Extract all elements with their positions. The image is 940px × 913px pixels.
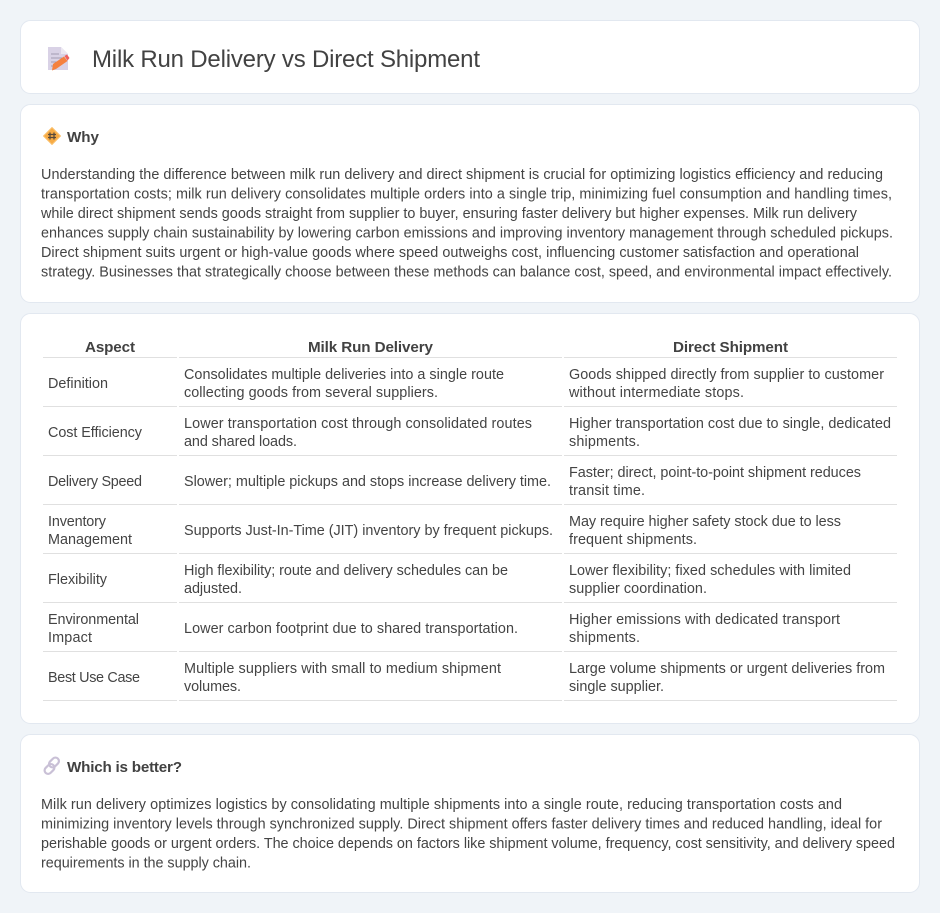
panel: why	[20, 104, 920, 302]
text block: which is better paragraph: requirements in the supply chain.	[41, 855, 251, 871]
row: delivery speed: transit time.	[569, 483, 645, 499]
row: delivery speed: Slower; multiple pickups and stops increase delivery time.	[184, 474, 551, 490]
row: cost efficiency	[43, 416, 897, 456]
row: inventory management	[43, 514, 897, 554]
row: flexibility: Flexibility	[48, 572, 108, 588]
row: definition: Goods shipped directly from supplier to customer	[569, 367, 884, 383]
text block: why paragraph: while direct shipment sends goods straight from supplier to buyer, ensuring faster delivery but higher expenses. Milk run delivery	[40, 206, 858, 222]
icon: warning diamond	[44, 128, 60, 144]
row: inventory management: Supports Just-In-Time (JIT) inventory by frequent pickups.	[184, 523, 553, 539]
panel: comparison table	[20, 314, 920, 724]
row: flexibility: Lower flexibility; fixed schedules with limited	[569, 563, 851, 579]
row: environmental impact	[43, 612, 897, 652]
heading: why: Why	[67, 129, 100, 146]
row: definition: without intermediate stops.	[568, 385, 744, 401]
row: inventory management: May require higher safety stock due to less	[569, 514, 841, 530]
row: cost efficiency: and shared loads.	[184, 434, 297, 450]
row: inventory management: Management	[48, 532, 132, 548]
row: inventory management: Inventory	[48, 514, 107, 530]
row: definition: Consolidates multiple deliveries into a single route	[184, 367, 504, 383]
row: environmental impact: Impact	[48, 630, 92, 646]
table header row	[43, 339, 897, 358]
text block: why paragraph: transportation costs; milk run delivery consolidates multiple orders into a single trip, minimizing fuel consumption and handling times,	[41, 186, 892, 202]
row: flexibility	[43, 563, 897, 602]
text block: which is better paragraph: perishable goods or urgent orders. The choice depends on factors like shipment volume, frequency, cost sensitivity, and delivery speed	[41, 836, 895, 852]
text block: which is better paragraph: Milk run delivery optimizes logistics by consolidating multiple shipments into a single route, reducing transportation costs and	[41, 797, 842, 813]
row: flexibility: supplier coordination.	[569, 581, 707, 597]
row: environmental impact: shipments.	[569, 630, 640, 646]
text block: why paragraph: strategy. Businesses that strategically choose between these methods can balance cost, speed, and environmental impact effectively.	[41, 264, 892, 280]
row: environmental impact: Higher emissions with dedicated transport	[569, 612, 840, 628]
title: Milk Run Delivery vs Direct Shipment	[92, 46, 480, 73]
row: cost efficiency: Higher transportation cost due to single, dedicated	[569, 416, 891, 432]
text block: which is better paragraph	[41, 797, 895, 871]
icon: document with pencil	[48, 47, 70, 70]
row: best use case: Best Use Case	[48, 670, 140, 686]
row: delivery speed: Delivery Speed	[48, 474, 142, 490]
row: best use case: Large volume shipments or urgent deliveries from	[569, 661, 885, 677]
row: inventory management: frequent shipments.	[569, 532, 697, 548]
table header row: Direct Shipment	[673, 339, 788, 356]
row: delivery speed: Faster; direct, point-to-point shipment reduces	[569, 465, 861, 481]
row: environmental impact: Lower carbon footprint due to shared transportation.	[184, 621, 518, 637]
row: flexibility: adjusted.	[184, 581, 242, 597]
heading: which is better: Which is better?	[67, 759, 182, 776]
row: delivery speed	[43, 465, 897, 504]
panel: which is better	[20, 734, 920, 892]
row: environmental impact: Environmental	[48, 612, 139, 628]
row: definition: Definition	[48, 376, 108, 392]
row: best use case	[43, 661, 897, 700]
row: cost efficiency: shipments.	[569, 434, 640, 450]
text block: why paragraph: Direct shipment suits urgent or high-value goods where speed outweighs cost, influencing customer satisfaction and operational	[41, 245, 859, 261]
row: best use case: volumes.	[184, 679, 241, 695]
icon: chain link	[43, 756, 60, 775]
row: cost efficiency: Cost Efficiency	[48, 425, 143, 441]
panel: header	[20, 20, 920, 94]
table header row: Aspect	[85, 339, 135, 356]
row: best use case: single supplier.	[569, 679, 664, 695]
table header row: Milk Run Delivery	[308, 339, 434, 356]
row: flexibility: High flexibility; route and delivery schedules can be	[184, 563, 508, 579]
row: best use case: Multiple suppliers with small to medium shipment	[184, 661, 501, 677]
text block: why paragraph: Understanding the difference between milk run delivery and direct shipment is crucial for optimizing logistics efficiency and reducing	[41, 167, 883, 183]
text block: which is better paragraph: minimizing inventory levels through synchronized supply. Direct shipment offers faster delivery times and reduced handling, ideal for	[41, 816, 882, 832]
row: cost efficiency: Lower transportation cost through consolidated routes	[184, 416, 532, 432]
row: definition: collecting goods from several suppliers.	[184, 385, 438, 401]
text block: why paragraph	[40, 167, 893, 280]
row: definition	[43, 367, 897, 406]
text block: why paragraph: enhances supply chain sustainability by lowering carbon emissions and improving inventory management through scheduled pickups.	[41, 225, 893, 241]
